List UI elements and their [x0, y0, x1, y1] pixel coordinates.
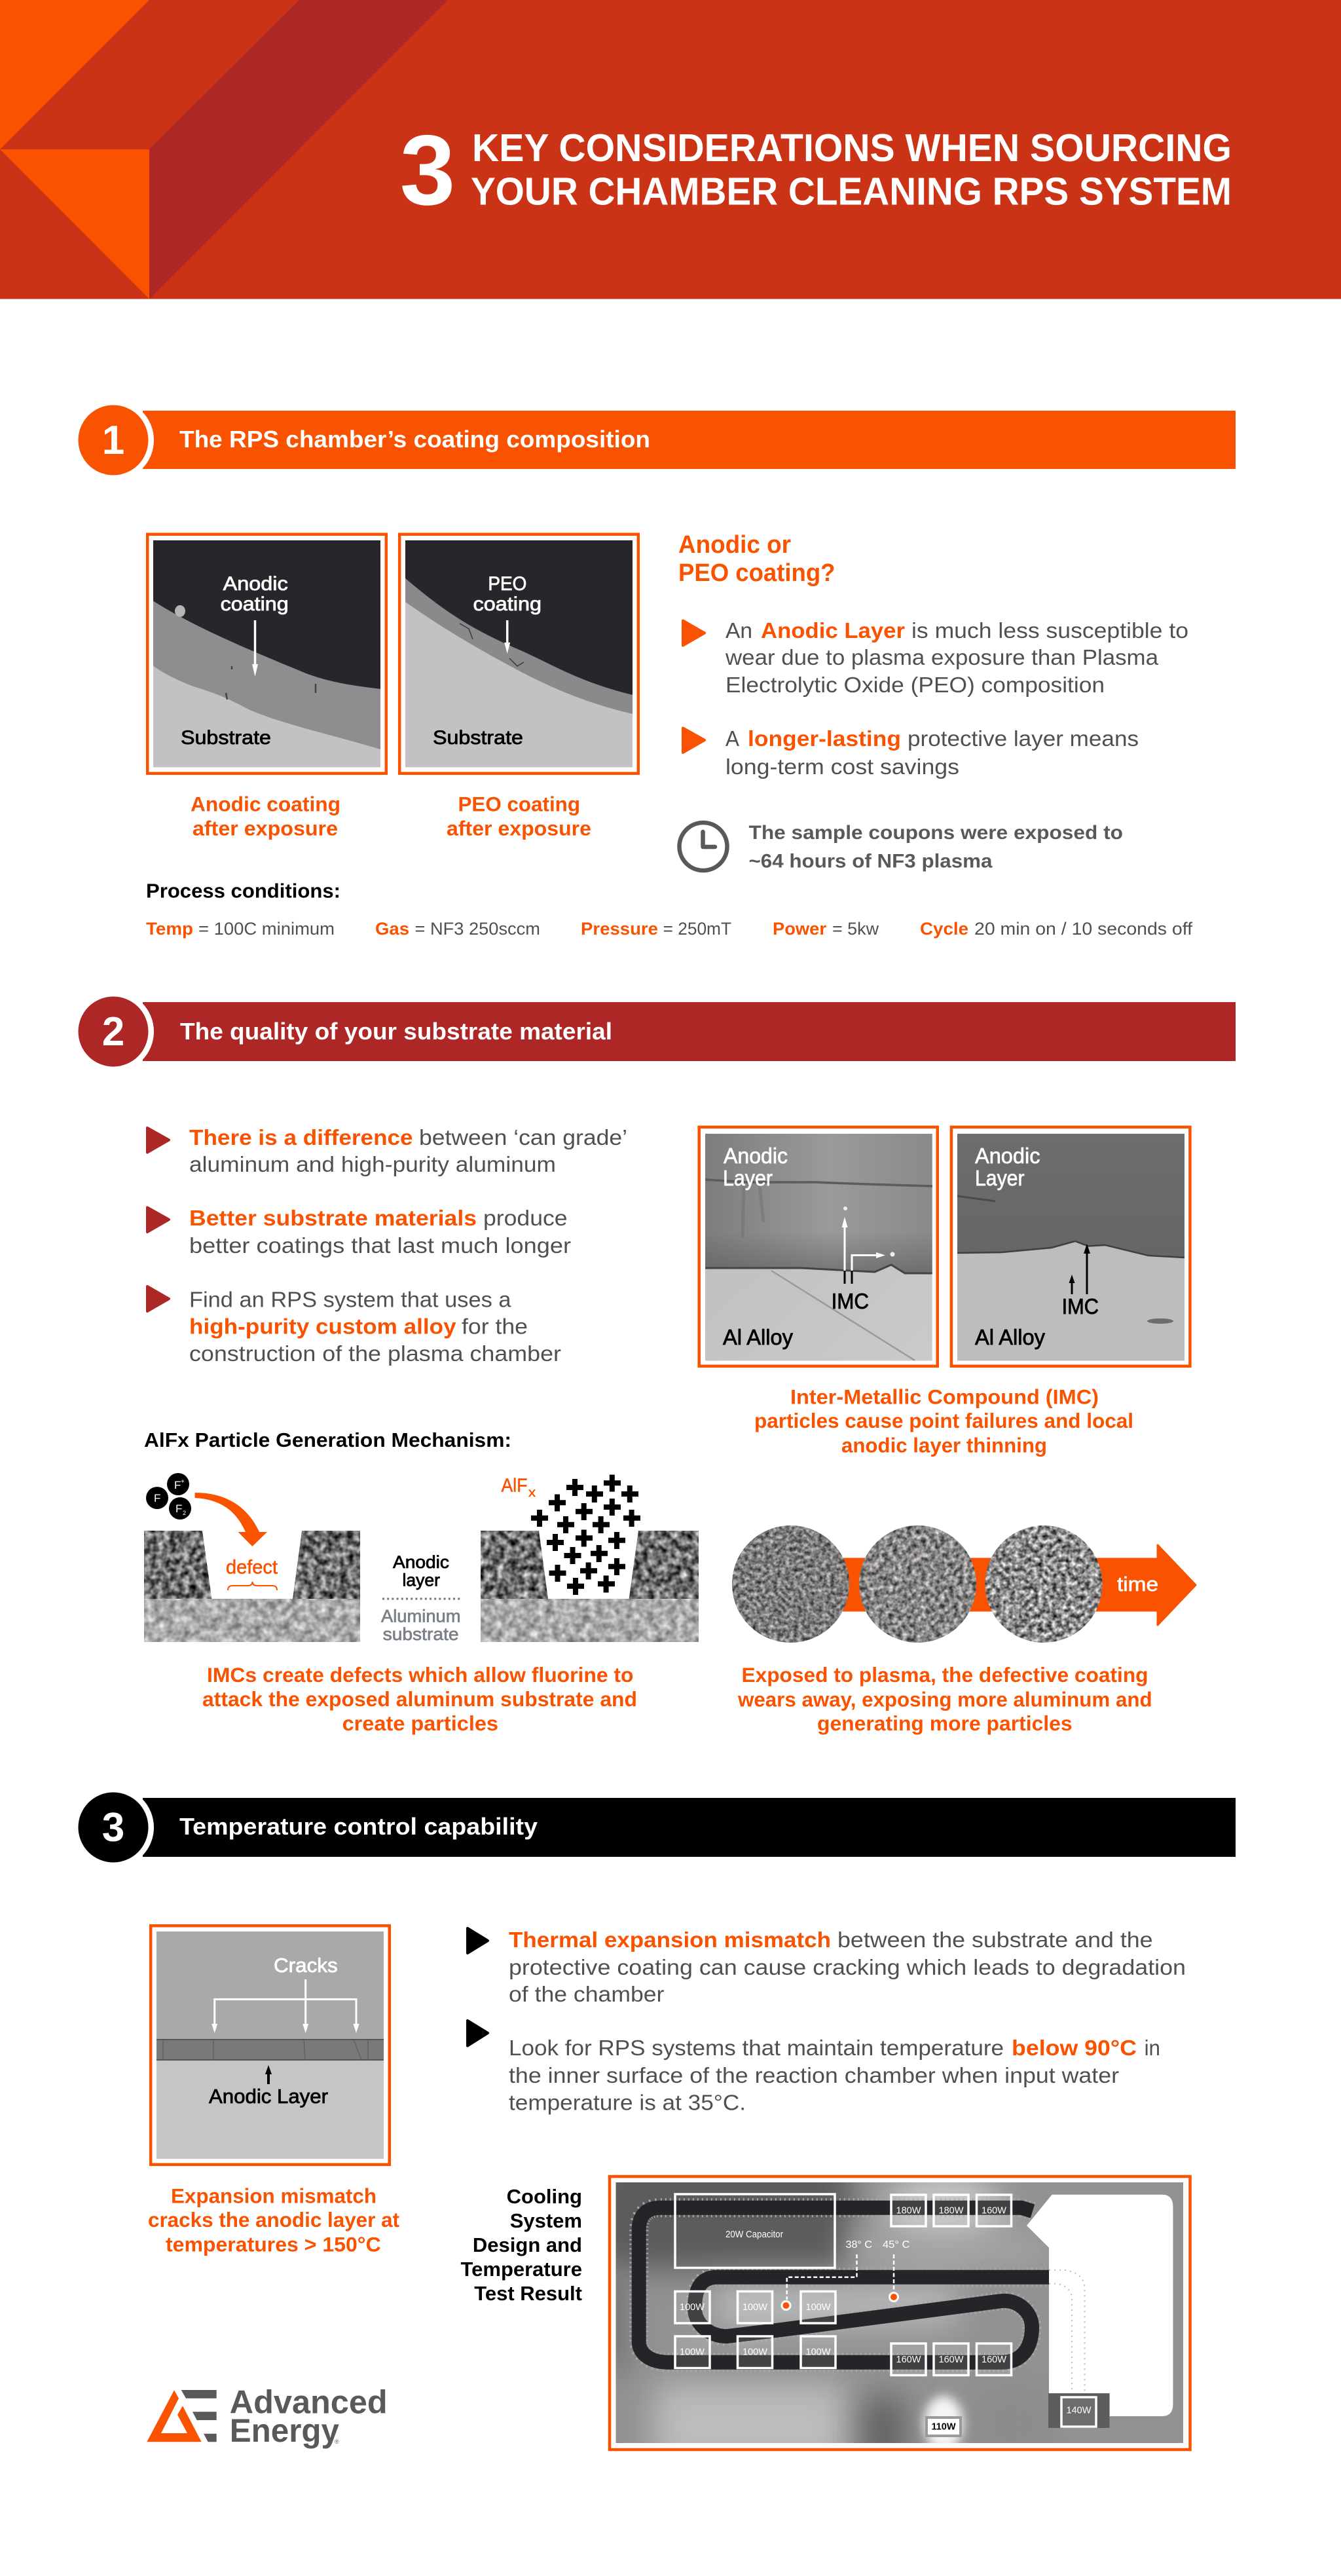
process condition values: Power — [773, 919, 826, 939]
bullet: high-purity custom alloy: Find an RPS system that uses a — [189, 1288, 511, 1311]
panel: IMC photo 2: Al Alloy — [975, 1325, 1045, 1349]
panel: cracks photo — [151, 1926, 390, 2165]
panel: cracks photo: Cracks — [274, 1954, 338, 1977]
bullet: longer lasting: A — [726, 726, 739, 751]
wattage labels: 160W — [982, 2355, 1006, 2365]
wattage labels: 160W — [982, 2206, 1006, 2216]
legend: layers: substrate — [383, 1624, 459, 1644]
heading: anodic or PEO: Anodic or — [678, 531, 791, 559]
process condition values: Pressure — [581, 919, 658, 939]
110W source — [927, 2417, 961, 2436]
caption: defective coating wears away: wears away, exposing more aluminum and — [737, 1687, 1152, 1711]
caption: defective coating wears away: Exposed to plasma, the defective coating — [741, 1663, 1148, 1687]
temperature markers: 45° C — [883, 2239, 910, 2250]
process condition values: Temp — [146, 919, 193, 939]
bullet: high-purity custom alloy: for the — [462, 1314, 528, 1339]
heading: cooling system design: System — [510, 2209, 582, 2232]
bullet: longer lasting: longer-lasting — [748, 726, 901, 751]
icon: fluorine particles: + — [181, 1478, 185, 1485]
bullet: better substrate materials: better coatings that last much longer — [189, 1233, 571, 1258]
process condition values: = 250mT — [663, 919, 731, 939]
diagram: defect in anodic layer — [144, 1473, 360, 1642]
caption: anodic coating: Anodic coating — [191, 793, 340, 816]
logo: Advanced Energy: Advanced — [230, 2383, 388, 2420]
caption: anodic coating — [191, 793, 340, 840]
process condition values: = 5kw — [832, 919, 879, 939]
sample circle 2 — [859, 1525, 976, 1643]
wattage labels — [680, 2206, 1006, 2365]
section 2 heading bar — [73, 991, 1236, 1072]
section 2 heading bar: 2 — [102, 1009, 124, 1055]
icon: clock — [680, 823, 727, 870]
legend: layers: Anodic — [393, 1552, 449, 1572]
wattage labels: 100W — [806, 2302, 831, 2313]
140W source — [1048, 2393, 1109, 2428]
caption: PEO coating: PEO coating — [458, 793, 580, 816]
caption: anodic coating: after exposure — [193, 816, 338, 840]
panel: PEO coating photo: coating — [473, 593, 542, 615]
heat sources top row — [891, 2195, 1011, 2226]
caption: IMC defects — [202, 1663, 637, 1735]
bullet: longer lasting: protective layer means — [908, 726, 1139, 751]
panel: IMC photo 1: IMC — [832, 1289, 869, 1313]
panel: anodic coating photo: Substrate — [181, 727, 271, 749]
wattage labels: 180W — [896, 2206, 921, 2216]
temperature markers: 38° C — [846, 2239, 872, 2250]
bullet: longer lasting: long-term cost savings — [726, 755, 959, 779]
bullet: anodic layer — [683, 618, 1188, 697]
process condition values: Cycle — [920, 919, 968, 939]
process condition values: = NF3 250sccm — [415, 919, 540, 939]
panel: PEO coating photo: Substrate — [433, 727, 523, 749]
icon: fluorine particles: F — [174, 1479, 181, 1491]
text: exposure note — [749, 822, 1123, 872]
icon: fluorine particles: F — [154, 1492, 160, 1504]
caption: IMC defects: create particles — [342, 1711, 498, 1735]
process condition values: Gas — [375, 919, 409, 939]
heading: AlFx mechanism: AlFx Particle Generation Mechanism: — [144, 1428, 511, 1451]
title: KEY CONSIDERATIONS WHEN SOURCING — [472, 126, 1232, 170]
bullet: below 90C: temperature is at 35°C. — [509, 2091, 746, 2114]
section 1 heading bar: 1 — [102, 418, 124, 463]
panel: IMC photo 2 — [951, 1127, 1190, 1366]
caption: PEO coating: after exposure — [447, 816, 591, 840]
wattage labels: 100W — [680, 2302, 705, 2313]
bullet: anodic layer: wear due to plasma exposure than Plasma — [725, 645, 1159, 669]
bullet: thermal expansion mismatch: of the chamber — [509, 1982, 664, 2006]
bullet: below 90C: below 90°C — [1012, 2036, 1137, 2060]
diagram: coating wear over time — [732, 1525, 1196, 1643]
panel: cracks photo: Anodic Layer — [209, 2085, 328, 2108]
bullet: below 90C — [468, 2021, 1160, 2114]
panel: IMC photo 2: IMC — [1062, 1294, 1099, 1318]
panel: anodic coating photo: coating — [221, 593, 289, 615]
section 3 heading bar: Temperature control capability — [179, 1813, 538, 1840]
diagram: defect in anodic layer: defect — [226, 1556, 278, 1578]
process condition values: = 100C minimum — [198, 919, 335, 939]
caption: IMC defects: attack the exposed aluminum substrate and — [202, 1687, 637, 1711]
heading: anodic or PEO: PEO coating? — [678, 559, 836, 587]
bullet: anodic layer: Electrolytic Oxide (PEO) composition — [726, 673, 1105, 697]
logo: Advanced Energy — [147, 2383, 388, 2449]
legend: layers — [381, 1552, 462, 1644]
caption: IMC particles — [754, 1385, 1133, 1457]
bullet: better substrate materials — [147, 1206, 571, 1258]
wattage labels: 100W — [743, 2347, 767, 2358]
bullet: below 90C: the inner surface of the reaction chamber when input water — [509, 2063, 1119, 2087]
caption: expansion mismatch: cracks the anodic layer at — [148, 2208, 400, 2231]
bullet: better substrate materials: produce — [483, 1206, 568, 1230]
capacitor box — [675, 2194, 835, 2268]
heading: cooling system design: Temperature — [461, 2258, 582, 2281]
heat sources bottom left row — [675, 2336, 836, 2368]
wattage labels: 180W — [939, 2206, 964, 2216]
logo: Advanced Energy: ® — [335, 2438, 339, 2445]
panel: PEO coating photo — [399, 534, 638, 774]
capacitor box: 20W Capacitor — [726, 2230, 783, 2240]
caption: expansion mismatch: Expansion mismatch — [171, 2184, 377, 2207]
section 3 heading bar — [73, 1787, 1236, 1868]
arrow: time: time — [1117, 1573, 1158, 1596]
panel: anodic coating photo: Anodic — [223, 573, 288, 595]
bullet: thermal expansion mismatch: Thermal expansion mismatch — [509, 1928, 831, 1952]
caption: IMC particles: Inter-Metallic Compound (IMC) — [790, 1385, 1099, 1408]
chamber cut-out — [1027, 2195, 1173, 2416]
panel: IMC photo 1: Anodic — [724, 1144, 788, 1168]
bullet: high-purity custom alloy: high-purity custom alloy — [189, 1314, 456, 1339]
temperature markers — [782, 2239, 910, 2309]
heading: cooling system design: Test Result — [474, 2282, 582, 2305]
heading: anodic or PEO — [678, 531, 836, 587]
diagram: AlFx particles generated: x — [528, 1486, 536, 1500]
bullet: thermal expansion mismatch: protective coating can cause cracking which leads to degradation — [509, 1955, 1186, 1979]
caption: PEO coating — [447, 793, 591, 840]
panel: PEO coating photo: PEO — [488, 573, 526, 595]
section 1 heading bar — [73, 400, 1236, 481]
caption: IMC particles: anodic layer thinning — [841, 1433, 1047, 1457]
text: exposure note: ~64 hours of NF3 plasma — [749, 850, 993, 872]
icon: fluorine particles: F — [175, 1503, 182, 1515]
bullet: anodic layer: Anodic Layer — [761, 618, 905, 643]
wattage labels: 100W — [680, 2347, 705, 2358]
bullet: there is a difference: between ‘can grade’ — [419, 1125, 627, 1149]
bullet: anodic layer: An — [726, 618, 752, 643]
legend: layers: Aluminum — [381, 1606, 461, 1626]
serpentine cooling channel — [639, 2208, 1049, 2362]
heading: cooling system design — [461, 2185, 582, 2305]
panel: anodic coating photo — [147, 534, 386, 774]
process condition values: 20 min on / 10 seconds off — [974, 919, 1193, 939]
bullet: there is a difference — [147, 1125, 627, 1176]
wattage labels: 100W — [806, 2347, 831, 2358]
process condition values — [146, 919, 1193, 939]
icon: plus particles — [531, 1475, 640, 1595]
panel: IMC photo 2: Anodic — [975, 1144, 1040, 1168]
section 1 heading bar: The RPS chamber’s coating composition — [179, 426, 650, 453]
140W source: 140W — [1067, 2405, 1092, 2416]
bullet: longer lasting — [683, 726, 1139, 779]
bullet: high-purity custom alloy: construction of the plasma chamber — [189, 1341, 561, 1366]
arrow: time — [818, 1545, 1196, 1625]
heading: process conditions: Process conditions: — [146, 879, 340, 903]
diagram: AlFx particles generated — [481, 1475, 699, 1642]
caption: expansion mismatch: temperatures > 150°C — [166, 2232, 381, 2256]
heat sources middle left row — [675, 2291, 836, 2323]
logo: Advanced Energy: Energy — [230, 2412, 339, 2449]
caption: defective coating wears away: generating more particles — [817, 1711, 1073, 1735]
title — [400, 115, 1232, 226]
bullet: there is a difference: aluminum and high-purity aluminum — [189, 1152, 556, 1176]
icon: fluorine particles: 2 — [183, 1510, 186, 1516]
diagram: AlFx particles generated: AlF — [502, 1475, 528, 1496]
wattage labels: 100W — [743, 2302, 767, 2313]
sample circle 1 — [732, 1525, 849, 1643]
text: exposure note: The sample coupons were exposed to — [749, 822, 1123, 844]
bullet: better substrate materials: Better substrate materials — [189, 1206, 477, 1230]
110W source: 110W — [931, 2422, 956, 2433]
bullet: thermal expansion mismatch — [468, 1928, 1186, 2006]
title: YOUR CHAMBER CLEANING RPS SYSTEM — [471, 170, 1232, 214]
panel: IMC photo 1: Al Alloy — [723, 1325, 793, 1349]
caption: expansion mismatch — [148, 2184, 400, 2256]
title: 3 — [400, 115, 455, 226]
wattage labels: 160W — [939, 2355, 964, 2365]
wattage labels: 160W — [896, 2355, 921, 2365]
caption: defective coating wears away — [737, 1663, 1152, 1735]
panel: thermal map — [608, 2175, 1192, 2451]
heading: cooling system design: Cooling — [507, 2185, 582, 2208]
panel: IMC photo 2: Layer — [975, 1166, 1024, 1190]
bullet: below 90C: Look for RPS systems that maintain temperature — [509, 2036, 1004, 2060]
arrow: fluorine into defect — [195, 1493, 267, 1546]
section 3 heading bar: 3 — [102, 1805, 124, 1850]
icon: fluorine particles — [146, 1473, 191, 1520]
bullet: anodic layer: is much less susceptible to — [911, 618, 1188, 643]
bullet: thermal expansion mismatch: between the substrate and the — [837, 1928, 1153, 1952]
caption: IMC defects: IMCs create defects which allow fluorine to — [207, 1663, 634, 1687]
sample circle 3 — [985, 1525, 1103, 1643]
panel: IMC photo 1: Layer — [723, 1166, 773, 1190]
header banner — [0, 0, 1341, 299]
heat sources bottom right row — [891, 2343, 1011, 2375]
bullet: below 90C: in — [1145, 2036, 1160, 2060]
bullet: there is a difference: There is a difference — [189, 1125, 413, 1149]
caption: IMC particles: particles cause point failures and local — [754, 1409, 1133, 1432]
heading: cooling system design: Design and — [473, 2233, 582, 2256]
section 2 heading bar: The quality of your substrate material — [180, 1018, 612, 1045]
bullet: high-purity custom alloy — [147, 1286, 561, 1366]
panel: IMC photo 1 — [699, 1127, 938, 1366]
legend: layers: layer — [402, 1571, 440, 1590]
